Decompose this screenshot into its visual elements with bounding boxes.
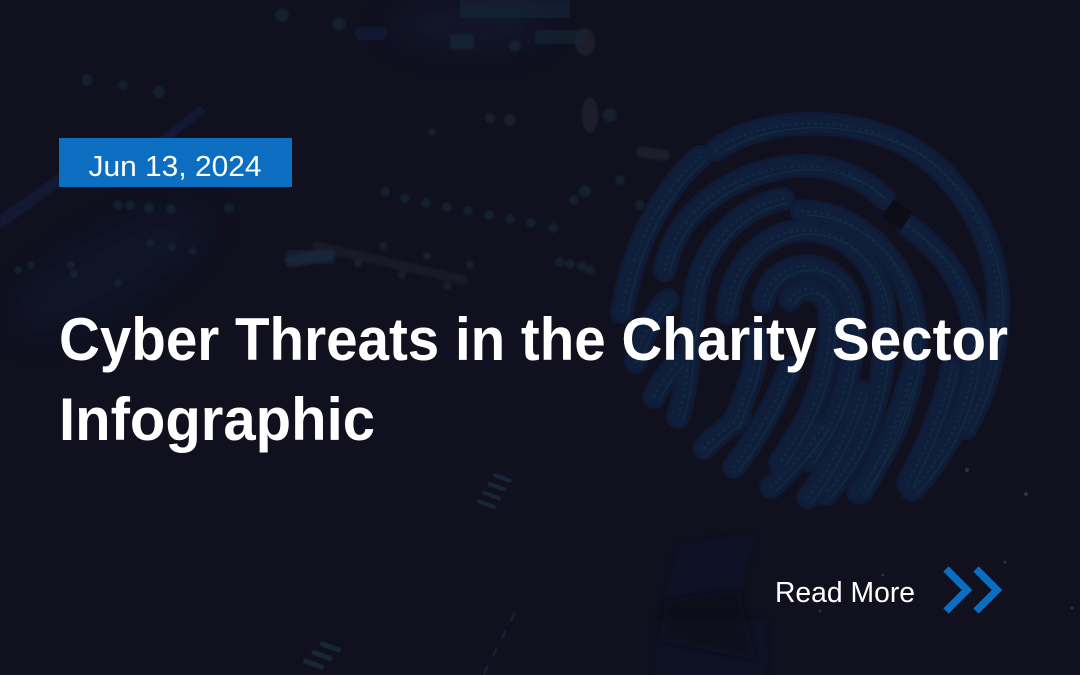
small lit points bbox=[818, 468, 1074, 612]
title bbox=[59, 306, 1008, 453]
title: Cyber Threats in the Charity Sector bbox=[59, 306, 1008, 373]
fingerprint chip gap bbox=[882, 199, 913, 230]
faint chip dashes lower centre bbox=[302, 471, 516, 675]
read more link: Read More bbox=[775, 577, 915, 609]
read more link bbox=[775, 569, 997, 611]
icon: double chevron arrow bbox=[946, 569, 997, 611]
title: Infographic bbox=[59, 386, 375, 453]
icon: fingerprint bbox=[622, 124, 1003, 501]
date badge: Jun 13, 2024 bbox=[88, 151, 262, 183]
blurred circuit dots bbox=[0, 0, 671, 290]
date badge bbox=[59, 138, 292, 187]
